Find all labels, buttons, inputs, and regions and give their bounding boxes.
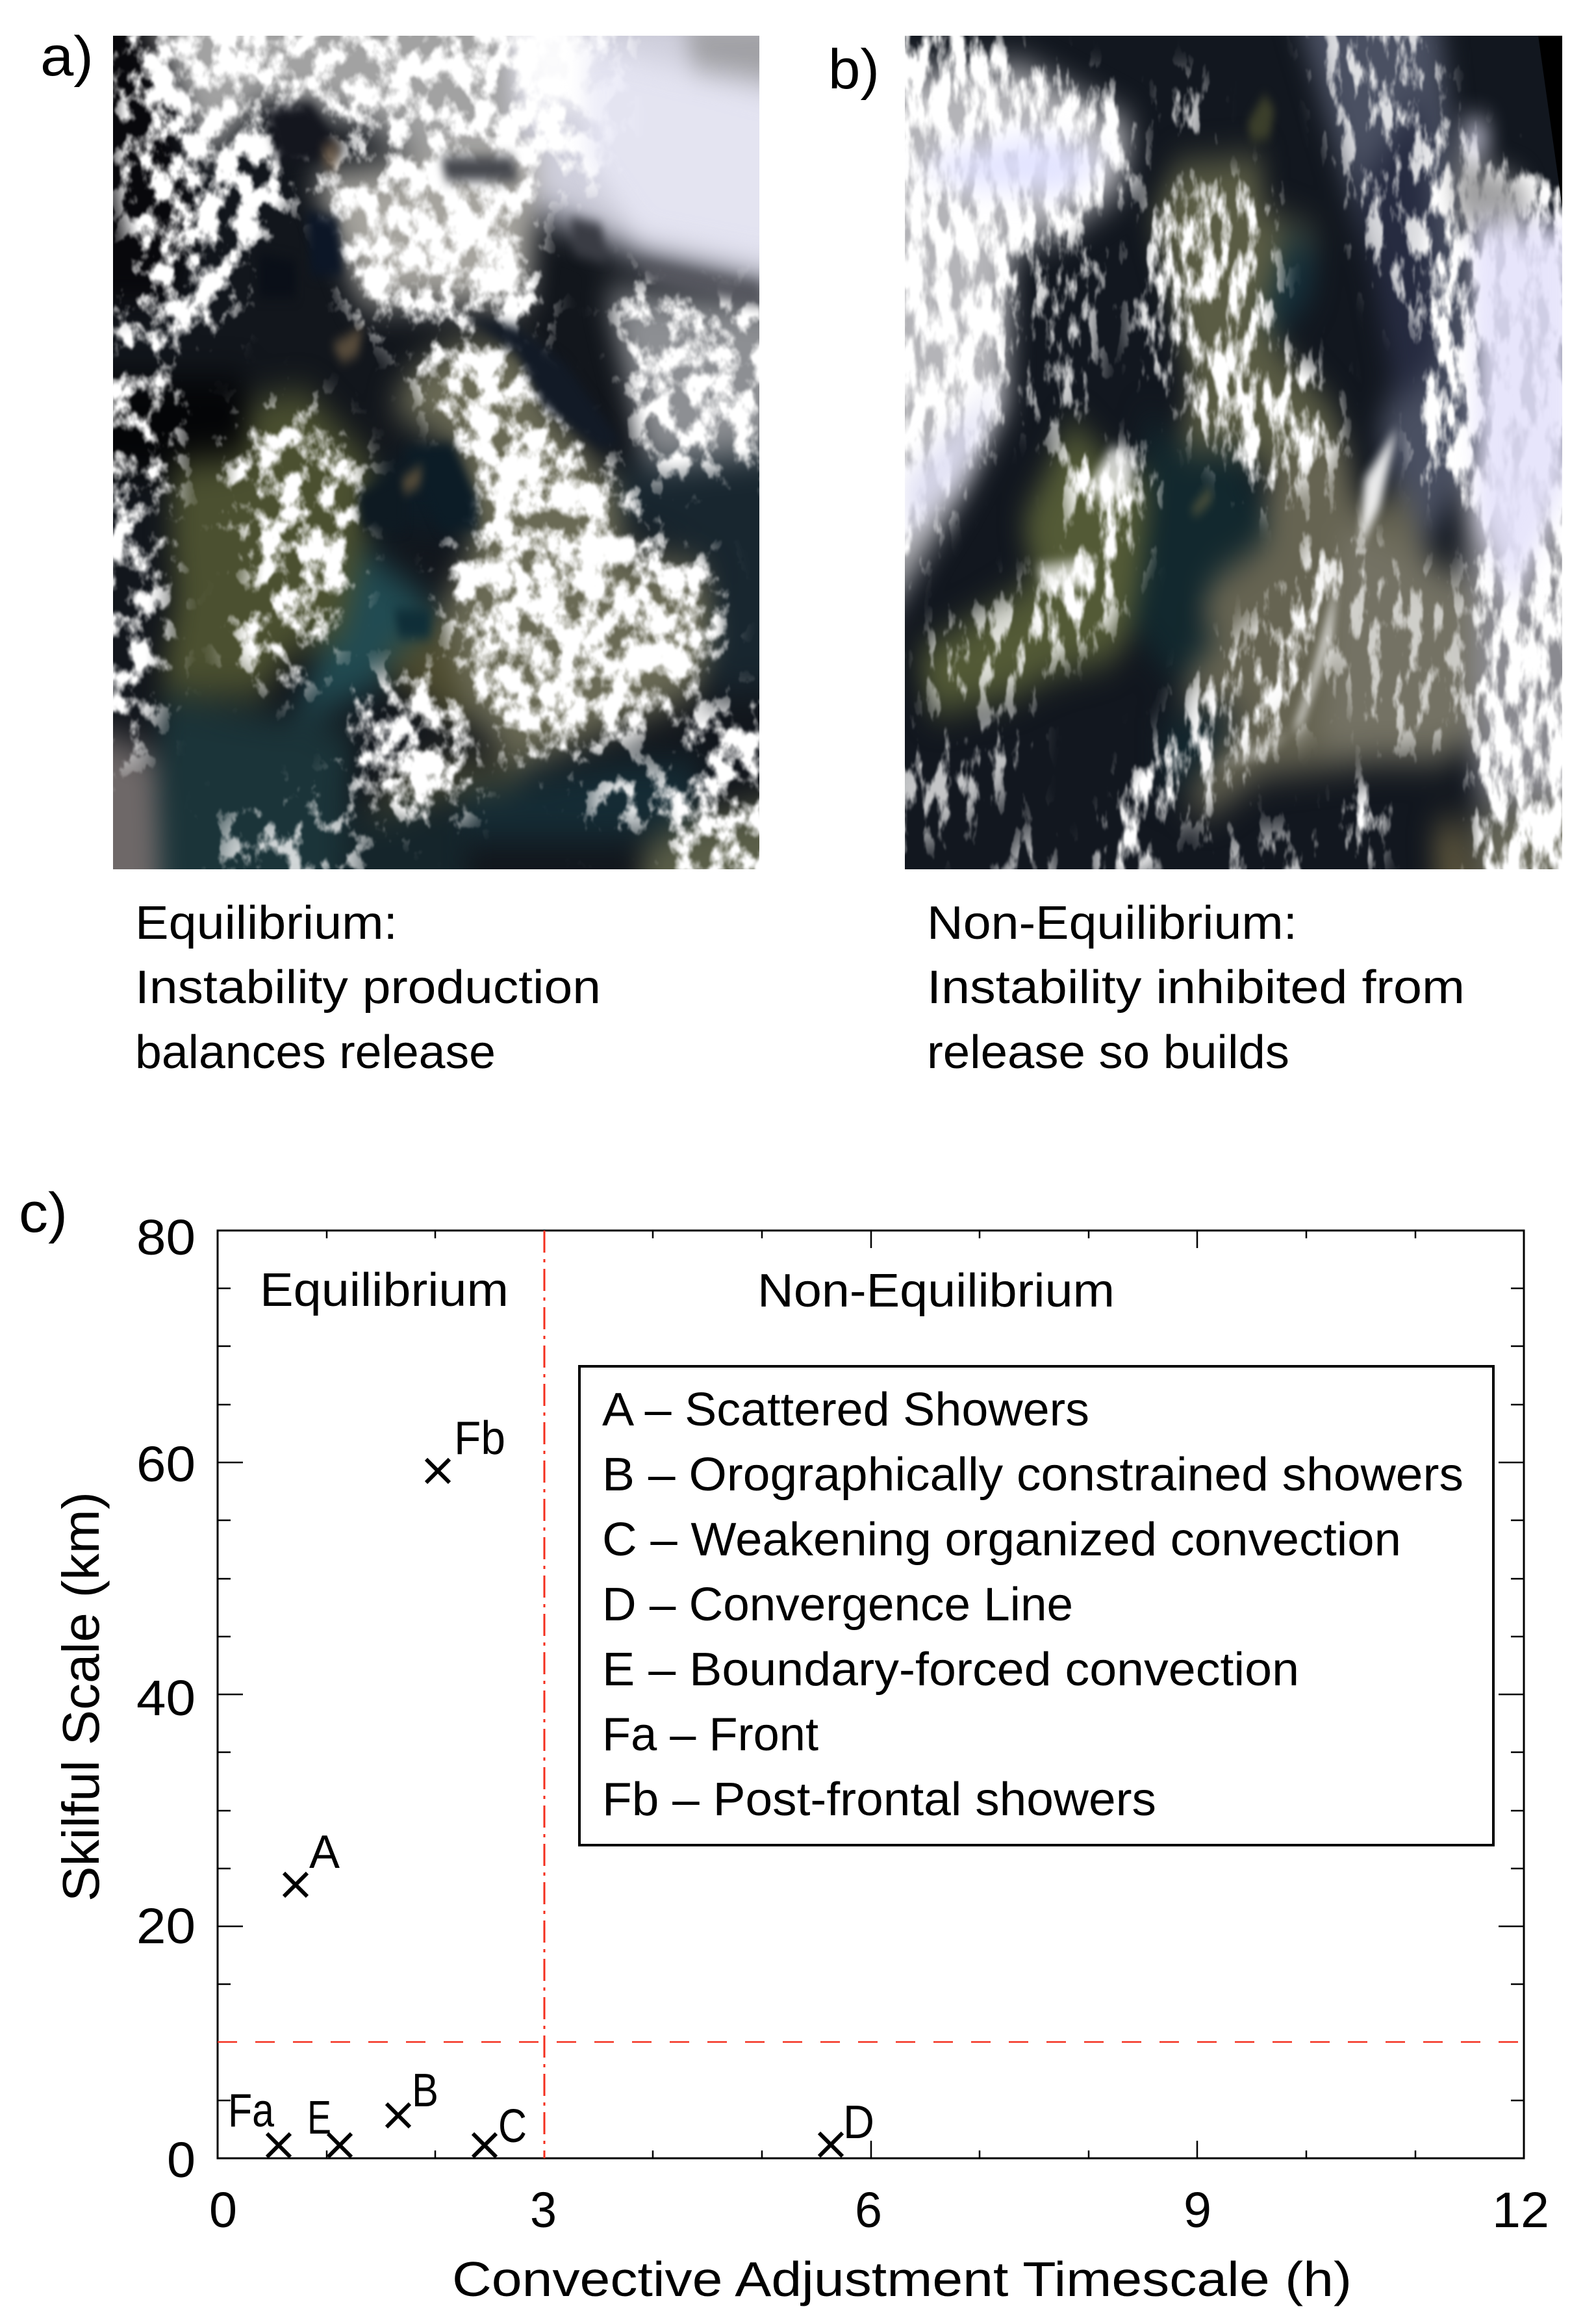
x axis tick labels: 9 bbox=[1184, 2182, 1211, 2238]
y axis tick labels: 80 bbox=[136, 1210, 196, 1266]
legend box: Fb – Post-frontal showers bbox=[602, 1774, 1156, 1826]
small islands bbox=[322, 142, 422, 494]
y axis tick labels: 0 bbox=[167, 2132, 196, 2188]
data point labels bbox=[228, 1412, 874, 2152]
data point labels: D bbox=[843, 2097, 874, 2149]
satellite image: non-equilibrium case over the British Isles bbox=[882, 0, 1592, 913]
threshold line: 3 h timescale bbox=[543, 1231, 546, 2158]
legend box: E – Boundary-forced convection bbox=[602, 1644, 1299, 1696]
y axis title: Skilful Scale (km) bbox=[52, 1492, 110, 1902]
panel label c: c) bbox=[19, 1182, 68, 1244]
caption: equilibrium bbox=[135, 897, 601, 1078]
islands and black swath corner bbox=[1189, 94, 1274, 515]
x axis title: Convective Adjustment Timescale (h) bbox=[452, 2252, 1352, 2306]
y axis tick labels: 20 bbox=[136, 1898, 196, 1954]
lavender high cloud bbox=[905, 123, 1572, 602]
dark sea gaps in the cloud bbox=[259, 102, 759, 638]
caption: equilibrium: Instability production bbox=[135, 962, 601, 1014]
x axis tick labels: 12 bbox=[1492, 2182, 1549, 2238]
x axis tick labels: 6 bbox=[855, 2182, 882, 2238]
bright cloud streaks bbox=[1037, 428, 1397, 769]
data point labels: C bbox=[498, 2100, 527, 2152]
legend box: C – Weakening organized convection bbox=[602, 1514, 1401, 1566]
caption: non-equilibrium bbox=[927, 897, 1465, 1078]
plot frame and tick marks bbox=[218, 1231, 1524, 2158]
threshold line: 10 km skilful scale bbox=[218, 2041, 1524, 2043]
data point labels: A bbox=[309, 1826, 340, 1878]
legend box: B – Orographically constrained showers bbox=[602, 1449, 1463, 1501]
x axis tick labels: 3 bbox=[530, 2182, 557, 2238]
y axis tick labels bbox=[136, 1210, 196, 2188]
region label: non-equilibrium: Non-Equilibrium bbox=[757, 1265, 1115, 1317]
panel label b: b) bbox=[828, 38, 880, 101]
clumpy white cloud field bbox=[79, 0, 787, 913]
caption: equilibrium: balances release bbox=[135, 1027, 496, 1078]
legend box bbox=[579, 1366, 1493, 1845]
legend box: Fa – Front bbox=[602, 1709, 818, 1761]
y axis tick labels: 40 bbox=[136, 1670, 196, 1726]
caption: non-equilibrium: Instability inhibited from bbox=[927, 962, 1465, 1014]
region label: equilibrium: Equilibrium bbox=[260, 1264, 509, 1316]
data point labels: Fb bbox=[454, 1412, 505, 1464]
x axis tick labels bbox=[209, 2182, 1549, 2238]
legend box: A – Scattered Showers bbox=[602, 1384, 1089, 1436]
panel label a: a) bbox=[40, 25, 94, 88]
y axis tick labels: 60 bbox=[136, 1436, 196, 1492]
data point labels: Fa bbox=[228, 2085, 275, 2137]
scatter chart: skilful scale vs convective adjustment timescale bbox=[52, 1210, 1549, 2306]
data point labels: B bbox=[412, 2065, 438, 2117]
caption: equilibrium: Equilibrium: bbox=[135, 897, 398, 949]
streaky white cloud field bbox=[882, 0, 1592, 913]
legend box: D – Convergence Line bbox=[602, 1579, 1073, 1631]
data point labels: E bbox=[307, 2092, 331, 2144]
satellite image: equilibrium case over the British Isles bbox=[79, 0, 787, 913]
lavender high cloud bbox=[518, 22, 787, 268]
x axis tick labels: 0 bbox=[209, 2182, 237, 2238]
caption: non-equilibrium: release so builds bbox=[927, 1027, 1289, 1078]
caption: non-equilibrium: Non-Equilibrium: bbox=[927, 897, 1297, 949]
data markers bbox=[267, 1459, 842, 2157]
